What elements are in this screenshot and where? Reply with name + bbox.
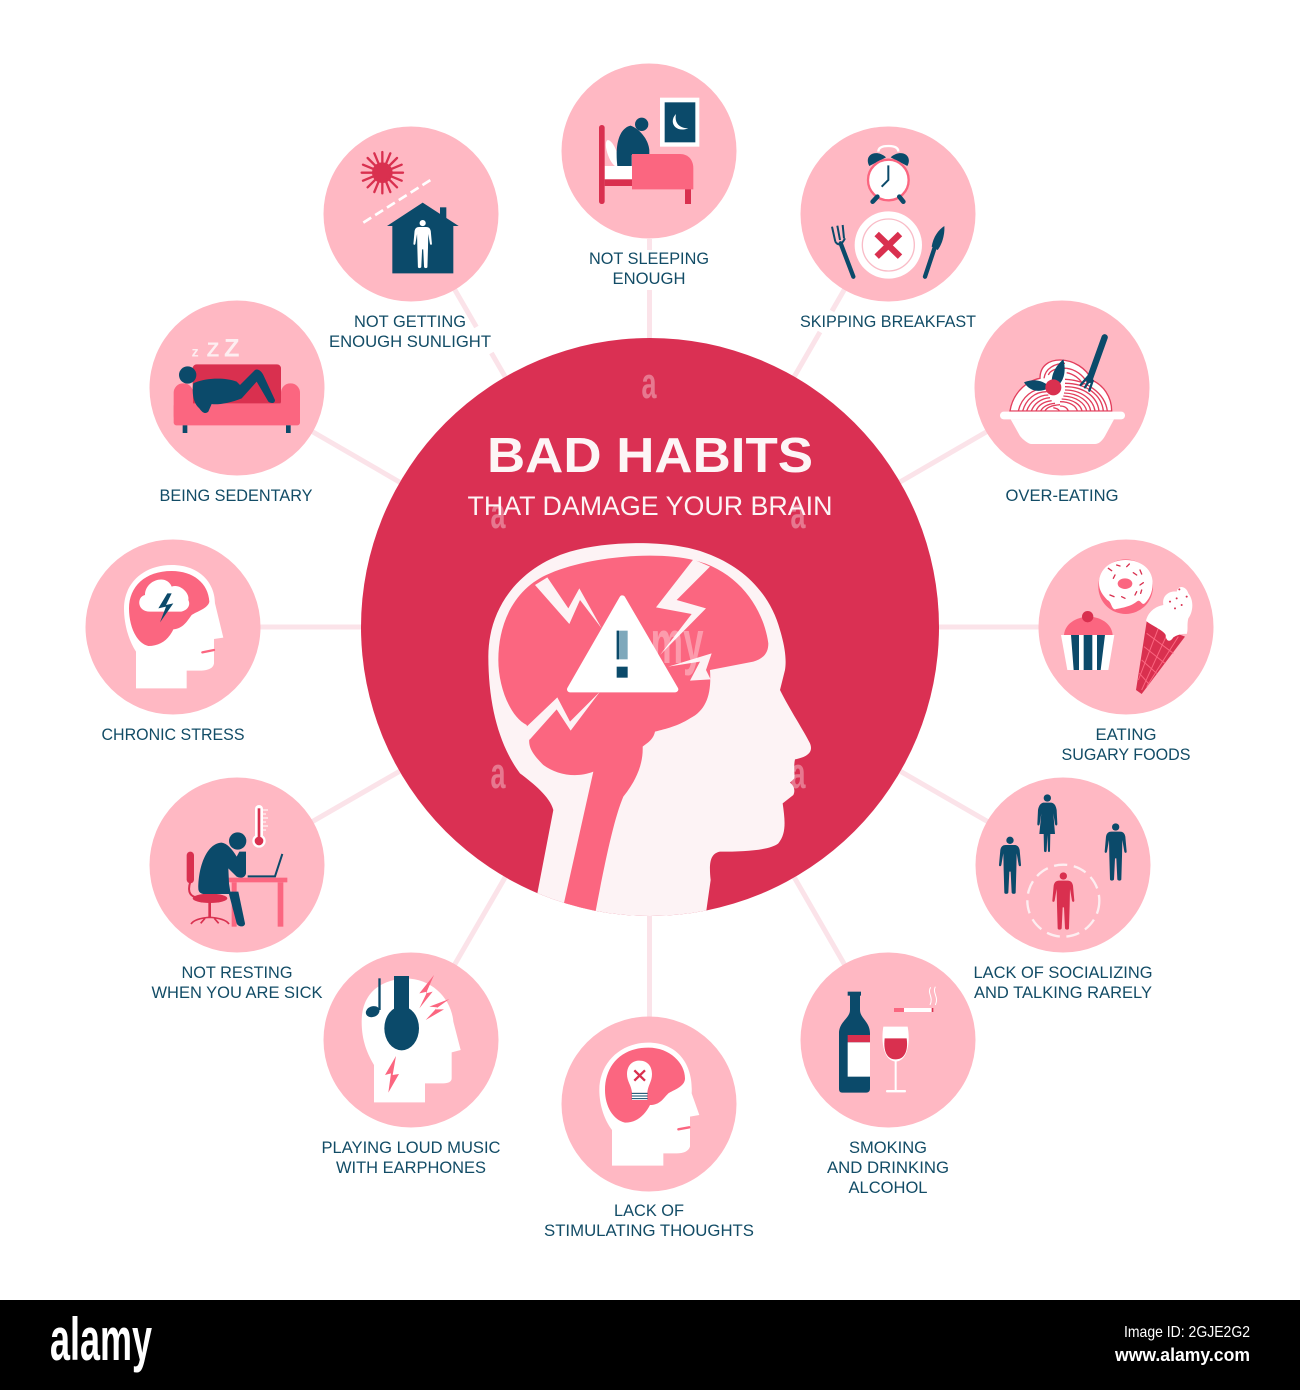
icon: person lying on sofa: Z [207,339,220,362]
image id: Image ID: 2GJE2G2 [1124,1324,1250,1341]
panel: central circle [361,338,939,920]
label: WITH EARPHONES [336,1159,486,1177]
stock watermark marks: a [642,359,657,408]
panel: over-eating [974,300,1150,505]
panel: not getting enough sunlight [324,126,498,351]
label: NOT GETTING [354,313,466,331]
label: BEING SEDENTARY [160,487,312,505]
label: STIMULATING THOUGHTS [544,1222,754,1240]
footer bar [0,1300,1300,1390]
panel: eating sugary foods [1038,540,1214,764]
label: CHRONIC STRESS [102,726,244,744]
label: AND TALKING RARELY [974,984,1152,1002]
icon: bottle, glass and cigarette [839,987,937,1093]
label: ALCOHOL [848,1179,928,1197]
icon: bowl of spaghetti [1000,337,1125,444]
icon: sun blocked from house [362,152,459,273]
label: LACK OF SOCIALIZING [974,964,1152,982]
label: SUGARY FOODS [1062,746,1190,764]
logo: alamy [50,1306,152,1373]
panel: chronic stress [86,540,260,744]
connector lines [173,214,1126,1104]
panel: skipping breakfast [800,126,976,331]
panel: not resting when sick [150,778,324,1002]
icon: person awake in bed [599,98,699,204]
label: EATING [1096,726,1156,744]
illustration: head with cracked brain [488,543,811,920]
icon: head with storm cloud [124,565,223,688]
icon: sick person working at desk [187,805,287,927]
stock watermark marks: a [790,489,806,538]
panel: smoking and drinking alcohol [800,952,976,1197]
label: PLAYING LOUD MUSIC [322,1139,501,1157]
label: WHEN YOU ARE SICK [152,984,322,1002]
icon: head with headphones [362,975,461,1102]
panel: not sleeping enough [562,64,736,288]
label: SMOKING [849,1139,927,1157]
label: AND DRINKING [827,1159,949,1177]
icon: isolated person among people [999,794,1127,937]
website: www.alamy.com [1114,1345,1250,1365]
stock watermark marks [490,359,806,798]
panel: being sedentary [150,300,324,505]
icon: donut cupcake and ice cream [1061,559,1192,694]
icon: head with crossed light bulb [599,1043,699,1166]
stock watermark marks: a [490,489,506,538]
panel: playing loud music [322,952,501,1177]
icon: person lying on sofa: Z [224,335,239,363]
icon: person lying on sofa: z [192,344,199,360]
label: SKIPPING BREAKFAST [800,313,976,331]
label: ENOUGH [612,270,686,288]
panel: lack of socializing [974,778,1152,1002]
stock watermark marks: my [650,609,704,676]
subtitle: THAT DAMAGE YOUR BRAIN [468,491,832,521]
label: NOT RESTING [182,964,292,982]
label: OVER-EATING [1006,487,1118,505]
label: ENOUGH SUNLIGHT [329,333,491,351]
icon: person lying on sofa [174,335,300,433]
title: BAD HABITS [487,428,813,483]
icon: alarm clock and empty plate [832,146,944,279]
label: LACK OF [614,1202,684,1220]
label: NOT SLEEPING [589,250,709,268]
stock watermark marks: a [490,749,506,798]
panel: lack of stimulating thoughts [544,1016,754,1240]
stock watermark marks: a [790,749,806,798]
